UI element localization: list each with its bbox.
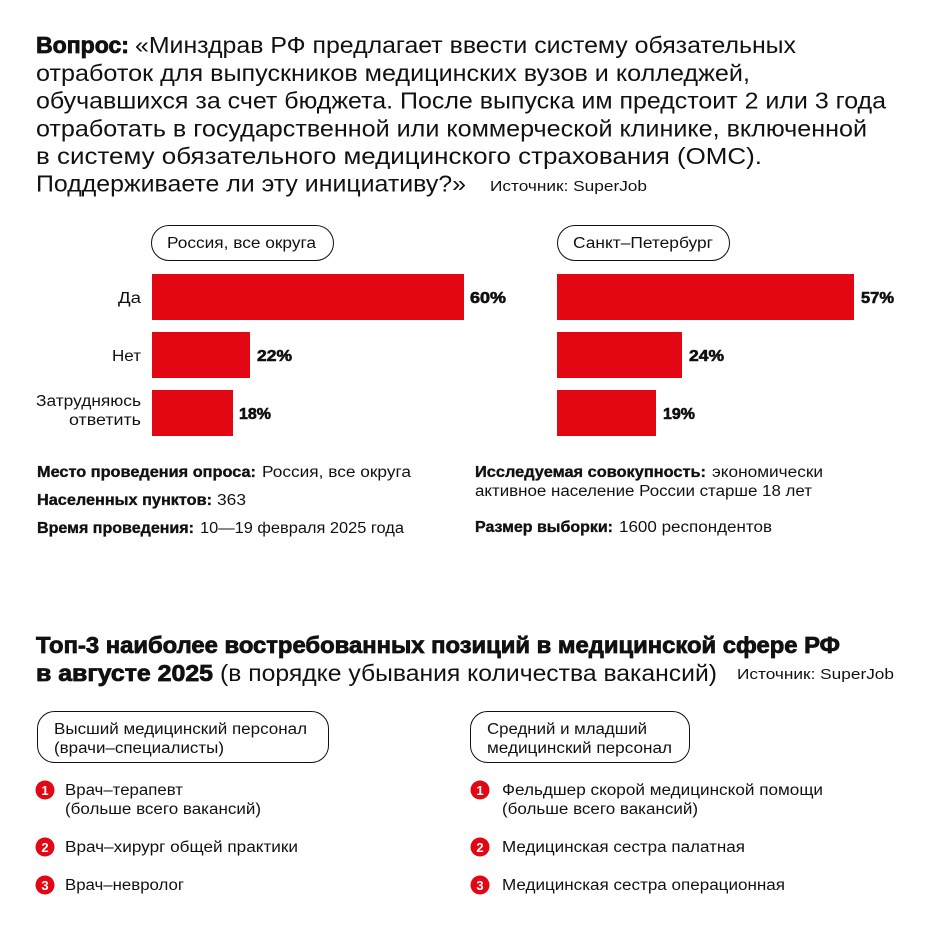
chart: Saint Petersburg	[557, 226, 894, 436]
bar: no 22%: 22%	[257, 348, 292, 365]
survey details left: Время проведения:	[37, 520, 194, 537]
question text block: обучавшихся за счет бюджета. После выпуска им предстоит 2 или 3 года	[36, 88, 887, 114]
pill: Russia: Россия, все округа	[167, 235, 316, 252]
heading: top-3 positions: в августе 2025	[36, 660, 213, 686]
list: mid and junior staff	[470, 712, 823, 894]
bar: unsure 19%: 19%	[663, 406, 695, 423]
row labels: ответить	[69, 412, 141, 429]
item 3: 3	[41, 878, 49, 893]
item 3: Врач–невролог	[65, 877, 184, 894]
question text block: в систему обязательного медицинского страхования (ОМС).	[36, 143, 762, 169]
pill: senior staff	[38, 712, 328, 762]
row labels: Затрудняюсь	[36, 393, 141, 410]
question text block: «Минздрав РФ предлагает ввести систему обязательных	[135, 32, 796, 58]
pill: mid and junior staff	[470, 712, 690, 762]
question text block: отработок для выпускников медицинских вузов и колледжей,	[36, 60, 750, 86]
pill: mid and junior staff: медицинский персонал	[487, 740, 672, 757]
bar: yes 57%	[557, 274, 894, 320]
bar: unsure 18%	[152, 390, 271, 436]
survey details left	[37, 464, 411, 537]
heading: top-3 positions: Топ-3 наиболее востребованных позиций в медицинской сфере РФ	[36, 632, 840, 658]
survey details right: Размер выборки:	[475, 519, 613, 536]
item 1: 1	[41, 783, 49, 798]
item 1	[470, 780, 823, 818]
survey details left: Населенных пунктов:	[37, 492, 212, 509]
pill: Saint Petersburg: Санкт–Петербург	[573, 235, 713, 252]
item 1: 1	[476, 783, 484, 798]
item 1: Врач–терапевт	[65, 782, 183, 799]
bar: yes 60%	[152, 274, 506, 320]
source: question: Источник: SuperJob	[490, 178, 647, 195]
item 3	[36, 876, 184, 894]
item 2: 2	[476, 840, 484, 855]
item 1: (больше всего вакансий)	[502, 801, 698, 818]
bar: no 22%	[152, 332, 292, 378]
question text block: Поддерживаете ли эту инициативу?»	[36, 170, 466, 196]
survey details left: 10—19 февраля 2025 года	[200, 520, 404, 537]
chart: Russia	[36, 226, 506, 436]
item 3: Медицинская сестра операционная	[502, 877, 785, 894]
item 1: (больше всего вакансий)	[65, 801, 261, 818]
pill: Saint Petersburg	[558, 226, 730, 260]
survey details right: Исследуемая совокупность:	[475, 464, 706, 481]
survey details left: Россия, все округа	[262, 464, 411, 481]
bar: unsure 19%	[557, 390, 695, 436]
survey details left: 363	[217, 492, 246, 509]
row labels	[36, 290, 141, 429]
survey details left: Место проведения опроса:	[37, 464, 256, 481]
bar: no 24%: 24%	[689, 348, 724, 365]
bar: unsure 18%: 18%	[239, 406, 271, 423]
survey details right: активное население России старше 18 лет	[475, 483, 812, 500]
source: top-3: Источник: SuperJob	[737, 666, 894, 683]
item 1: Фельдшер скорой медицинской помощи	[502, 782, 823, 799]
question text block: Вопрос:	[36, 32, 129, 58]
item 2: 2	[41, 840, 49, 855]
heading: top-3 positions: (в порядке убывания количества вакансий)	[220, 660, 717, 686]
item 3: 3	[476, 878, 484, 893]
item 2: Медицинская сестра палатная	[502, 839, 745, 856]
row labels: Нет	[112, 348, 141, 365]
pill: Russia	[152, 226, 334, 260]
question text block	[36, 32, 887, 196]
question text block: отработать в государственной или коммерческой клинике, включенной	[36, 116, 867, 142]
pill: senior staff: Высший медицинский персонал	[54, 721, 307, 738]
bar: no 24%	[557, 332, 724, 378]
row labels: Да	[118, 290, 141, 307]
bar: yes 60%: 60%	[470, 290, 506, 307]
item 1	[36, 780, 261, 818]
list: senior staff	[36, 712, 328, 894]
item 2: Врач–хирург общей практики	[65, 839, 298, 856]
survey details right: экономически	[712, 464, 823, 481]
survey details right: 1600 респондентов	[619, 519, 772, 536]
heading: top-3 positions	[36, 632, 840, 686]
pill: senior staff: (врачи–специалисты)	[54, 740, 224, 757]
bar: yes 57%: 57%	[861, 290, 894, 307]
survey details right	[475, 464, 823, 536]
pill: mid and junior staff: Средний и младший	[487, 721, 647, 738]
